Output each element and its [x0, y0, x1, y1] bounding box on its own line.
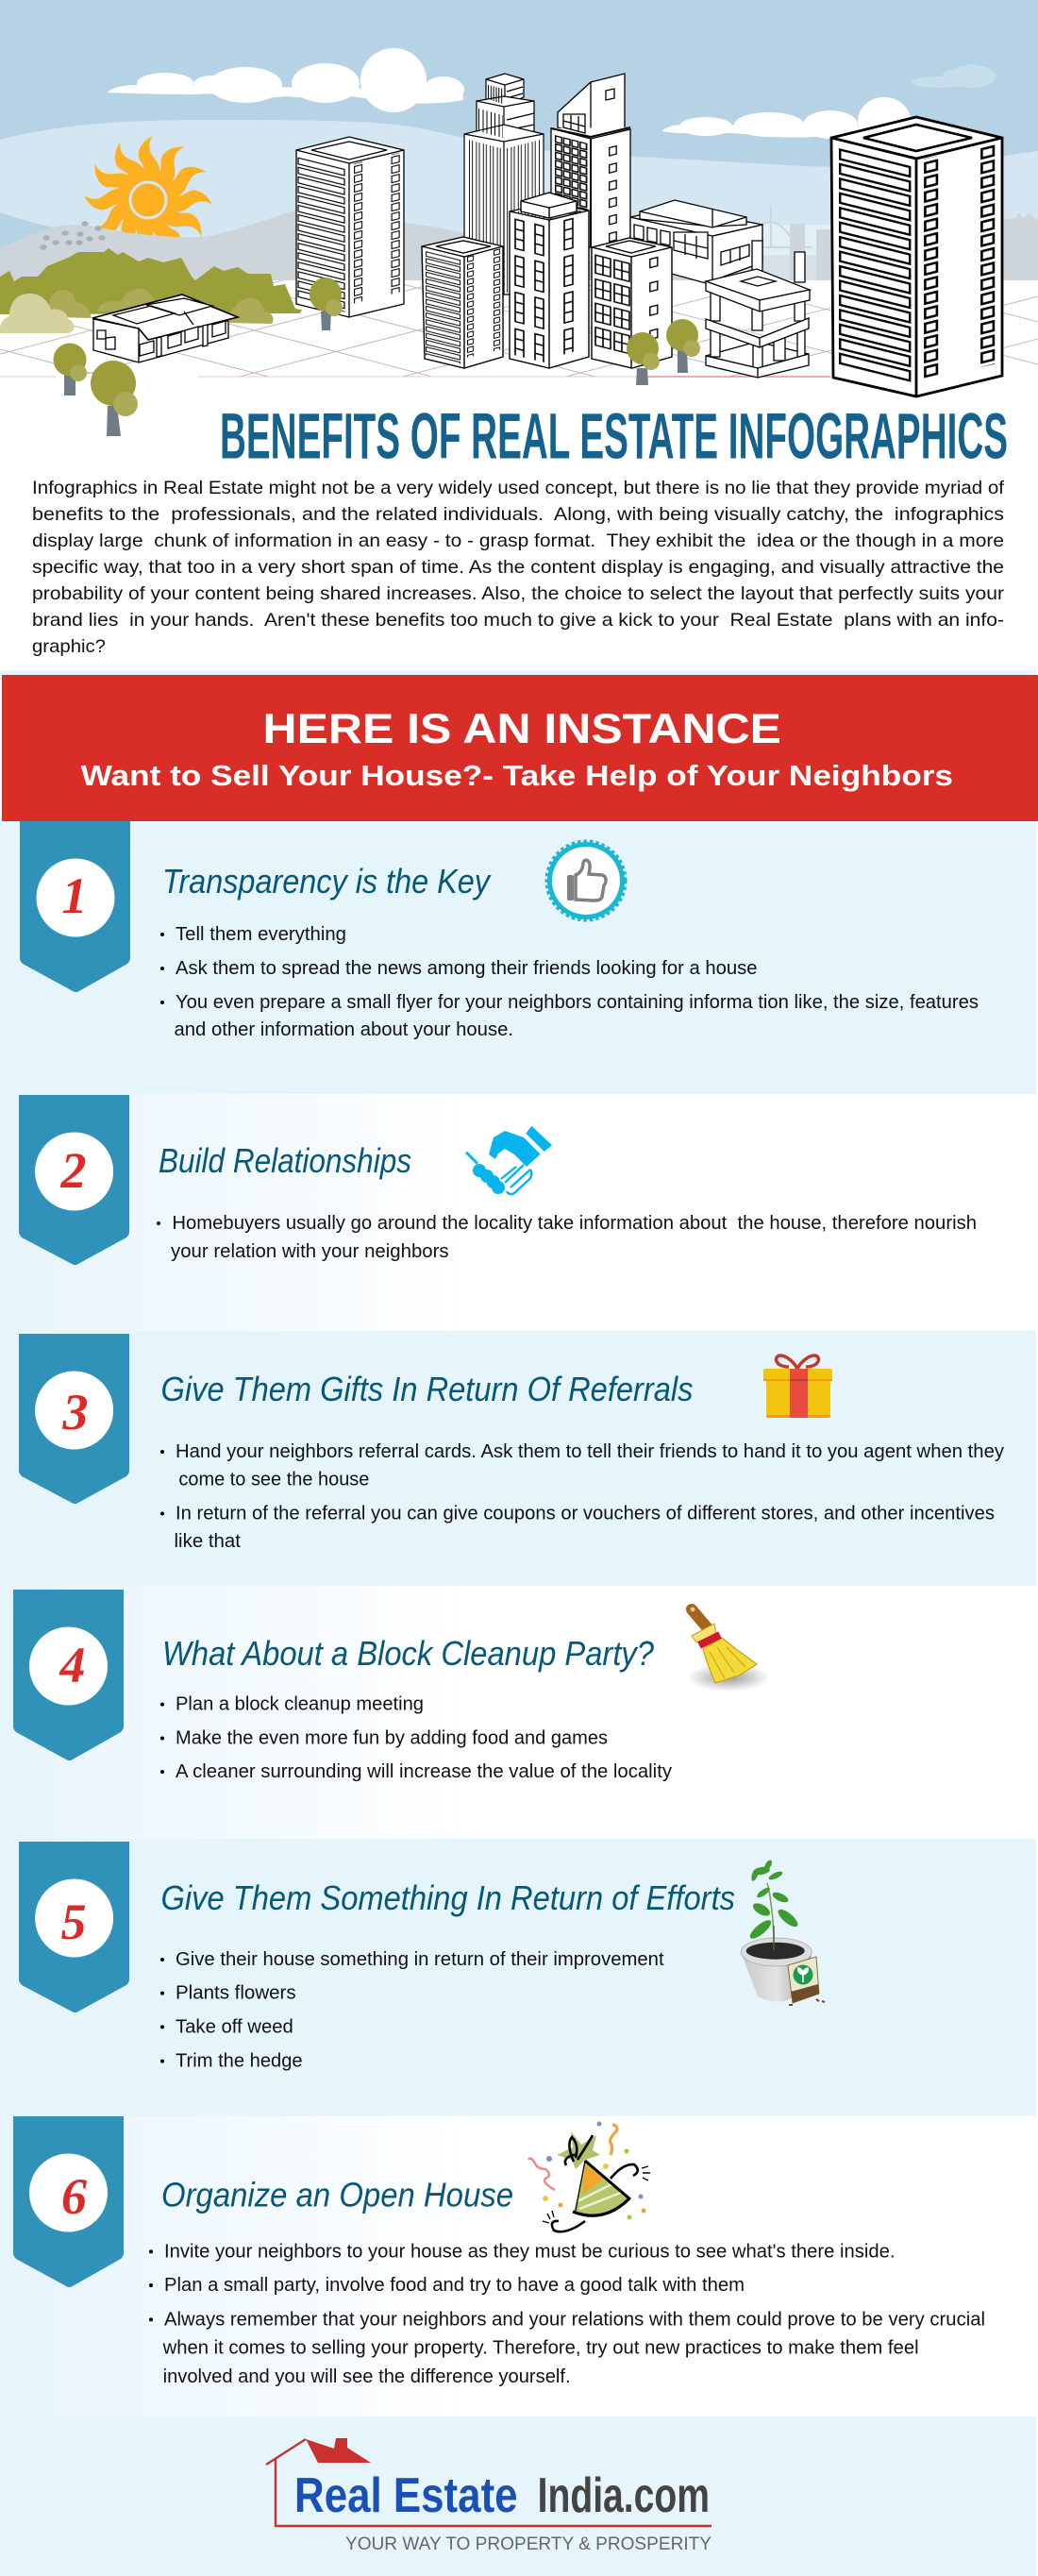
section 3 badge [19, 1334, 129, 1504]
section 5 heading: Give Them Something In Return of Efforts [160, 1878, 735, 1917]
intro paragraph: graphic? [32, 636, 106, 657]
icon: party hat [528, 2122, 650, 2231]
section 3 badge: 3 [62, 1384, 89, 1440]
building: tall slatted tower [296, 137, 404, 317]
building: open frame structure [706, 241, 810, 378]
section 6 bullets [149, 2241, 985, 2387]
banner subheading: Want to Sell Your House?- Take Help of Your Neighbors [81, 760, 953, 792]
icon: broom [687, 1607, 770, 1692]
cloud: right [661, 97, 911, 144]
section 6 bullets: when it comes to selling your property. Therefore, try out new practices to make them feel [162, 2338, 919, 2359]
section 6 badge: 6 [61, 2168, 87, 2225]
small house [92, 295, 238, 362]
blue mid hill [0, 212, 94, 283]
footer panel [0, 2416, 1036, 2576]
section 5 bullets: Take off weed [176, 2016, 293, 2037]
section 3 heading: Give Them Gifts In Return Of Referrals [160, 1370, 693, 1408]
logo: house outline [266, 2438, 712, 2526]
section 2 bullets [157, 1213, 977, 1262]
logo tagline: YOUR WAY TO PROPERTY & PROSPERITY [345, 2534, 712, 2554]
building: low wide block [630, 200, 762, 283]
banner heading: HERE IS AN INSTANCE [262, 706, 781, 752]
intro paragraph: display large chunk of information in an easy - to - grasp format. They exhibit the idea or the though in a more [32, 530, 1004, 551]
icon: thumbs up badge [546, 841, 626, 920]
section 4 panel [0, 1586, 1036, 1839]
section 6 badge [13, 2116, 124, 2287]
section 5 bullets [160, 1949, 664, 2072]
section 5 badge: 5 [60, 1894, 87, 1950]
far skyline silhouette [745, 205, 836, 281]
section 4 heading: What About a Block Cleanup Party? [162, 1634, 655, 1673]
logo wordmark: India.com: India.com [538, 2468, 710, 2523]
section 1 panel [0, 821, 1036, 1094]
section 4 bullets: Plan a block cleanup meeting [176, 1694, 424, 1715]
building: slanted top tower [551, 74, 630, 247]
icon: gift box [763, 1355, 832, 1418]
section 1 bullets: Tell them everything [176, 924, 346, 945]
section 6 bullets: involved and you will see the difference yourself. [163, 2366, 571, 2387]
ground plane with grid [0, 280, 1038, 378]
section 4 badge: 4 [59, 1637, 85, 1693]
bushes [0, 289, 274, 333]
grey hills [0, 210, 764, 283]
sky [0, 0, 1038, 283]
section 6 bullets: Plan a small party, involve food and try to have a good talk with them [164, 2275, 745, 2296]
section 1 badge: 1 [62, 867, 87, 924]
building: grid window block [592, 238, 672, 368]
section 6 bullets: Always remember that your neighbors and your relations with them could prove to be very crucial [164, 2309, 985, 2330]
section 1 bullets: You even prepare a small flyer for your neighbors containing informa tion like, the size, features [176, 992, 979, 1013]
sun [84, 136, 212, 264]
building: short slatted block [422, 237, 503, 368]
building: large foreground tower [831, 117, 1002, 396]
section 2 bullets: Homebuyers usually go around the locality take information about the house, therefore nourish [172, 1213, 977, 1234]
intro paragraph: probability of your content being shared increases. Also, the choice to select the layout that perfectly suits your [32, 583, 1005, 604]
intro paragraph: specific way, that too in a very short span of time. As the content display is engaging, and visually attractive the [32, 557, 1004, 578]
section 4 badge [13, 1590, 124, 1760]
section 3 bullets [160, 1441, 1004, 1552]
trees [53, 278, 700, 436]
building: vertical stripe tower [464, 74, 544, 295]
red banner [2, 675, 1038, 821]
intro paragraph [32, 478, 1005, 657]
section 2 bullets: your relation with your neighbors [171, 1241, 449, 1262]
section 1 heading: Transparency is the Key [162, 862, 492, 901]
section 2 panel [0, 1094, 1036, 1331]
section 2 heading: Build Relationships [159, 1141, 411, 1180]
grey skyline right [1000, 212, 1038, 283]
logo wordmark: Real Estate: Real Estate [294, 2468, 518, 2523]
cloud: large left [108, 48, 464, 112]
hill dots [40, 221, 106, 250]
section 1 bullets [160, 924, 979, 1040]
section 1 bullets: Ask them to spread the news among their friends looking for a house [176, 958, 757, 979]
section 3 bullets: Hand your neighbors referral cards. Ask them to tell their friends to hand it to you agent when they [176, 1441, 1004, 1462]
section 6 panel [0, 2116, 1036, 2416]
section 6 heading: Organize an Open House [161, 2176, 513, 2214]
section 3 panel [0, 1331, 1036, 1586]
section 4 bullets: Make the even more fun by adding food and games [176, 1727, 608, 1748]
header illustration: city skyline [0, 0, 1038, 436]
band above red banner [0, 670, 1036, 675]
icon: handshake [466, 1126, 552, 1194]
intro paragraph: brand lies in your hands. Aren't these benefits too much to give a kick to your Real Estate plans with an info- [32, 610, 1004, 631]
section 4 bullets: A cleaner surrounding will increase the value of the locality [176, 1761, 672, 1782]
section 4 bullets [160, 1694, 672, 1782]
icon: potted plant [741, 1859, 825, 2005]
intro paragraph: benefits to the professionals, and the related individuals. Along, with being visually catchy, the infographics [32, 504, 1004, 525]
forest [0, 248, 302, 314]
section 1 badge [20, 821, 130, 992]
section 5 bullets: Trim the hedge [176, 2051, 303, 2072]
building: centre block [510, 193, 589, 368]
distant pale hill [0, 120, 1038, 283]
section 5 badge [19, 1842, 129, 2012]
section 5 panel [0, 1839, 1036, 2116]
section 3 bullets: like that [174, 1531, 241, 1552]
section 5 bullets: Plants flowers [176, 1983, 296, 2004]
section 6 bullets: Invite your neighbors to your house as they must be curious to see what's there inside. [164, 2241, 895, 2262]
intro paragraph: Infographics in Real Estate might not be a very widely used concept, but there is no lie that they provide myriad of [32, 478, 1005, 498]
cloud: pale far right [912, 64, 996, 88]
section 5 bullets: Give their house something in return of their improvement [176, 1949, 664, 1970]
section 1 bullets: and other information about your house. [174, 1019, 513, 1040]
section 3 bullets: In return of the referral you can give coupons or vouchers of different stores, and other incentives [176, 1503, 995, 1524]
section 2 badge: 2 [60, 1142, 87, 1199]
section 2 badge [19, 1095, 129, 1265]
section 3 bullets: come to see the house [178, 1469, 369, 1490]
